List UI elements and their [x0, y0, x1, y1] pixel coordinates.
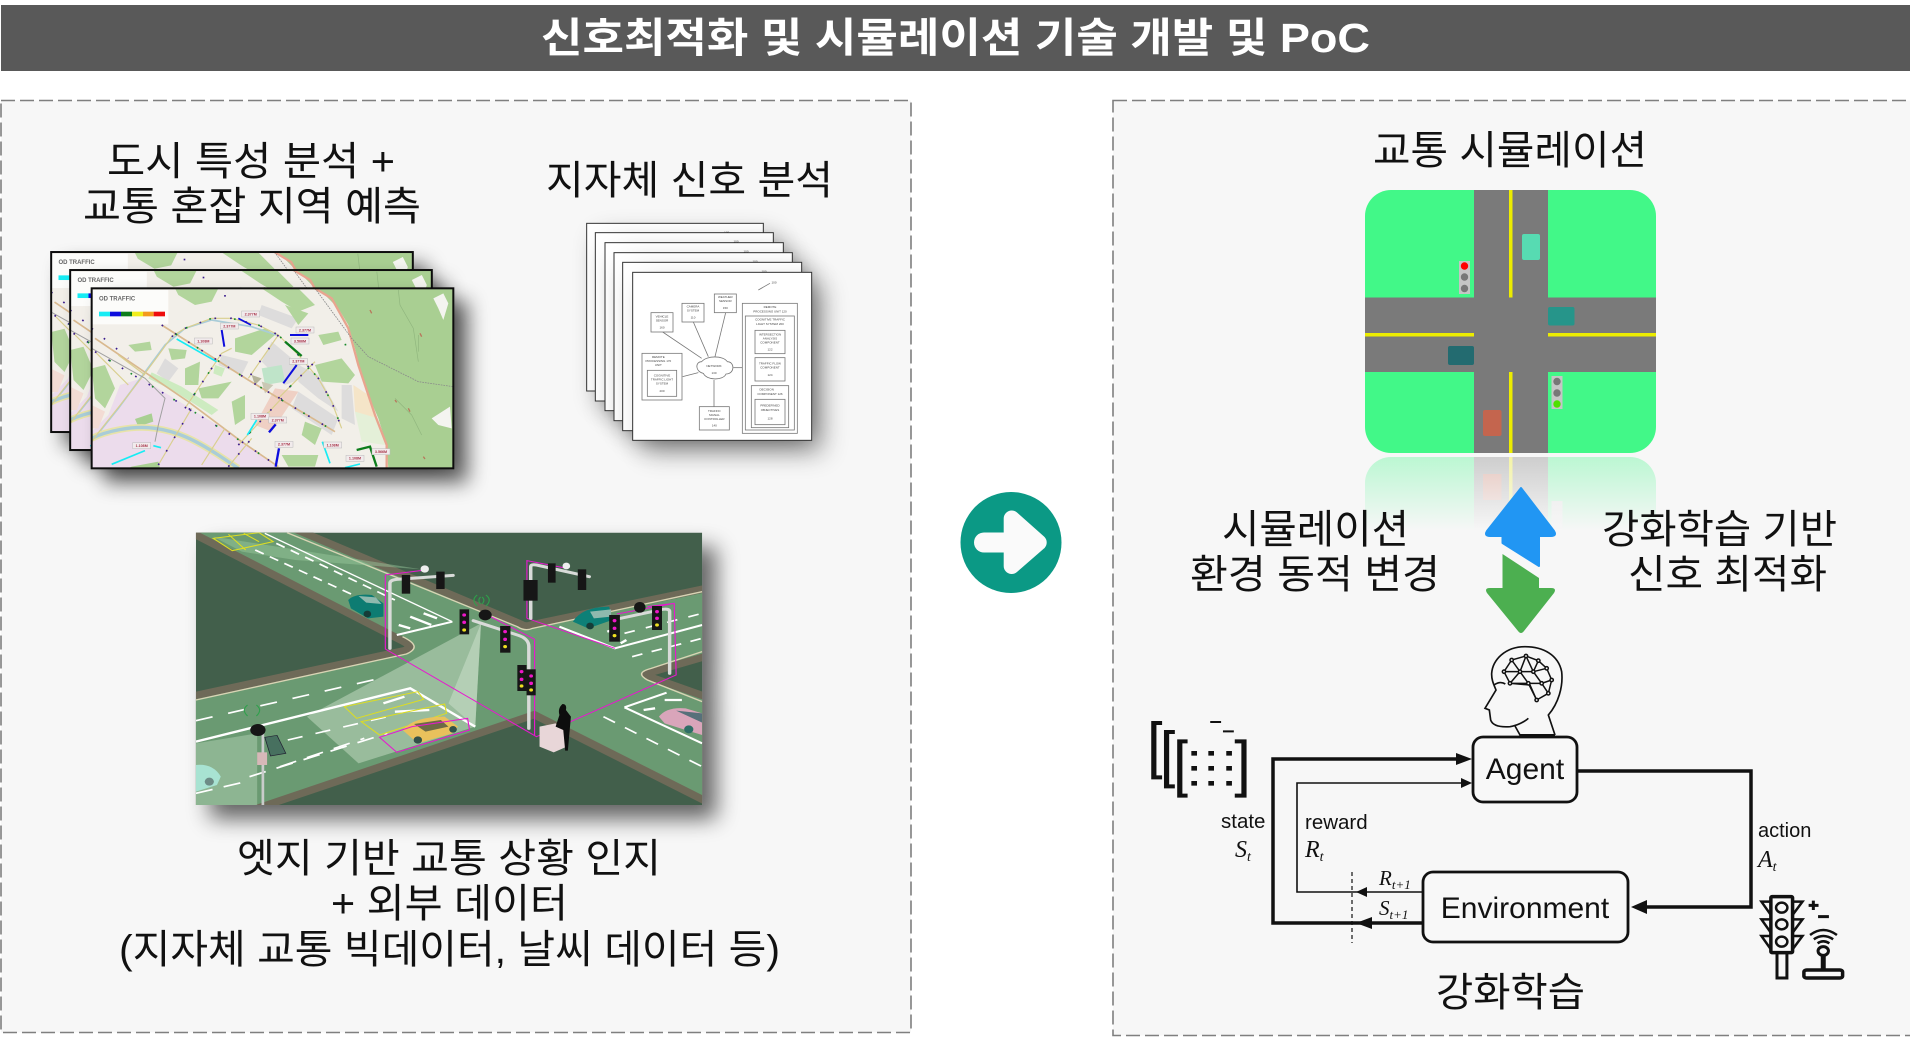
system diagram: 110 — [691, 315, 696, 319]
cars — [196, 595, 702, 792]
reward label: reward — [1305, 811, 1368, 834]
caption: edge detection and external data: 엣지 기반 교통 상황 인지 — [237, 837, 661, 881]
system diagram — [642, 280, 797, 433]
heading: city analysis: 교통 혼잡 지역 예측 — [83, 185, 421, 229]
system diagram: VEHICLE — [656, 314, 668, 318]
system diagram: 122 — [768, 348, 773, 352]
image: stacked signal documents — [587, 223, 812, 440]
system diagram: OBJECTIVES — [761, 408, 779, 412]
system diagram: CAMERA — [687, 304, 699, 308]
environment box — [1423, 872, 1628, 942]
action label — [1756, 820, 1811, 875]
operator at cabinet — [540, 704, 571, 752]
system diagram: 200 — [660, 389, 665, 393]
system diagram: 128 — [768, 416, 773, 420]
road network — [192, 530, 709, 808]
system diagram: REMOTE — [652, 355, 665, 359]
system diagram: LIGHT SYSTEM 200 — [756, 322, 784, 326]
icon: right arrow circle — [960, 492, 1062, 593]
system diagram: PREDEFINED — [760, 404, 780, 408]
system diagram: TRAFFIC FLOW — [759, 361, 781, 365]
panel: left analysis — [1, 100, 911, 1032]
caption: dynamic environment change: 환경 동적 변경 — [1190, 553, 1440, 597]
agent box: Agent — [1486, 753, 1565, 786]
reward label: t — [1320, 850, 1325, 865]
system diagram: 150 — [723, 306, 728, 310]
image: edge sensing intersection — [192, 530, 709, 808]
state label: S — [1235, 837, 1247, 863]
system diagram: COGNITIVE TRAFFIC — [755, 318, 786, 322]
system diagram: PROCESSING UNIT 120 — [753, 309, 787, 313]
system diagram: SIGNAL — [709, 413, 720, 417]
map sheet middle — [70, 270, 432, 450]
system diagram: 100 — [772, 280, 777, 284]
action label: action — [1758, 820, 1811, 842]
connector lines — [1273, 759, 1751, 943]
ground — [196, 533, 702, 805]
image: stacked signal documents: 100 — [762, 269, 767, 273]
state label — [1221, 810, 1265, 865]
caption: dynamic environment change: 시뮬레이션 — [1222, 508, 1409, 552]
image: stacked traffic maps — [51, 252, 453, 468]
reward label: R — [1305, 837, 1320, 863]
title bar — [1, 5, 1910, 71]
caption: dynamic environment change — [1190, 508, 1440, 597]
system diagram: ANALYSIS — [763, 336, 777, 340]
signal red — [1459, 261, 1470, 294]
system diagram: INTERSECTION — [759, 332, 781, 336]
system diagram: 140 — [712, 424, 717, 428]
caption: RL based signal optimization: 강화학습 기반 — [1602, 508, 1837, 552]
system diagram: COMPONENT — [760, 366, 780, 370]
system diagram: REMOTE — [764, 305, 776, 309]
caption: RL based signal optimization: 신호 최적화 — [1628, 553, 1827, 597]
system diagram: 130 — [712, 371, 717, 375]
icon: traffic light controller — [1761, 897, 1843, 978]
system diagram: DECISION — [759, 388, 774, 392]
caption: RL based signal optimization — [1602, 508, 1837, 597]
icon: state matrices — [1151, 721, 1247, 798]
system diagram: COMPONENT 126 — [757, 392, 783, 396]
state label: t — [1247, 850, 1252, 865]
system diagram: TRAFFIC LIGHT — [651, 378, 673, 382]
title bar: 신호최적화 및 시뮬레이션 기술 개발 및 PoC — [541, 15, 1370, 61]
heading: traffic simulation: 교통 시뮬레이션 — [1373, 129, 1647, 173]
document sheets: 100 — [724, 230, 729, 234]
action label: t — [1773, 860, 1778, 875]
next reward label: t+1 — [1392, 877, 1411, 892]
sensor coverage cones — [196, 537, 481, 805]
state label: state — [1221, 810, 1265, 833]
caption: edge detection and external data — [119, 837, 780, 972]
agent box — [1473, 737, 1577, 802]
arrow: green down — [1486, 554, 1555, 633]
arrowheads — [1356, 753, 1647, 929]
signal green — [1552, 376, 1562, 409]
icon: head with neural network — [1485, 647, 1562, 735]
system diagram: SYSTEM — [656, 382, 669, 386]
system diagram: 160 — [660, 325, 665, 329]
image: stacked signal documents: 100 — [753, 260, 758, 264]
caption: reinforcement learning: 강화학습 — [1436, 971, 1585, 1015]
simulation reflection — [1365, 457, 1656, 521]
system diagram: SYSTEM — [687, 308, 700, 312]
roads — [1474, 190, 1548, 453]
simulation intersection — [1365, 190, 1656, 453]
caption: edge detection and external data: (지자체 교통 빅데이터, 날씨 데이터 등) — [119, 928, 780, 972]
lane markings — [196, 533, 702, 793]
system diagram: CONTROLLER — [704, 417, 725, 421]
map sheet back — [51, 252, 413, 432]
panel: right simulation — [1113, 100, 1910, 1036]
system diagram: WEATHER — [718, 295, 734, 299]
system diagram: SENSOR — [656, 318, 669, 322]
image: stacked signal documents: 100 — [744, 250, 749, 254]
heading: local government signal analysis: 지자체 신호 분석 — [546, 159, 833, 203]
document sheets — [587, 223, 763, 391]
heading: city analysis: 도시 특성 분석 + — [107, 140, 395, 184]
caption: edge detection and external data: + 외부 데이터 — [331, 882, 568, 926]
image: stacked signal documents: 100 — [734, 240, 739, 244]
system diagram: UNIT — [655, 363, 662, 367]
diagram: reinforcement learning loop — [1151, 647, 1843, 978]
system diagram: SENSOR — [719, 299, 732, 303]
next state label: t+1 — [1390, 907, 1408, 922]
environment box: Environment — [1441, 892, 1610, 925]
system diagram: NETWORK — [706, 364, 722, 368]
traffic signal heads — [402, 563, 662, 695]
detection zones — [213, 533, 447, 735]
cameras and radios — [244, 563, 646, 765]
magenta monitored area — [385, 561, 676, 737]
system diagram: COGNITIVE — [654, 374, 670, 378]
next state label: S — [1379, 896, 1390, 920]
next reward label: R — [1379, 866, 1392, 890]
system diagram: COMPONENT — [760, 340, 780, 344]
system diagram: 124 — [768, 373, 773, 377]
heading: city analysis — [83, 140, 421, 229]
vehicles — [1522, 234, 1540, 260]
system diagram: TRAFFIC — [708, 409, 721, 413]
map sheet front — [92, 288, 453, 468]
action label: A — [1758, 847, 1773, 873]
signal poles — [263, 565, 670, 805]
reward label — [1304, 811, 1368, 865]
system diagram: PROCESSING 170 — [645, 359, 672, 363]
arrow: blue up — [1486, 488, 1555, 566]
